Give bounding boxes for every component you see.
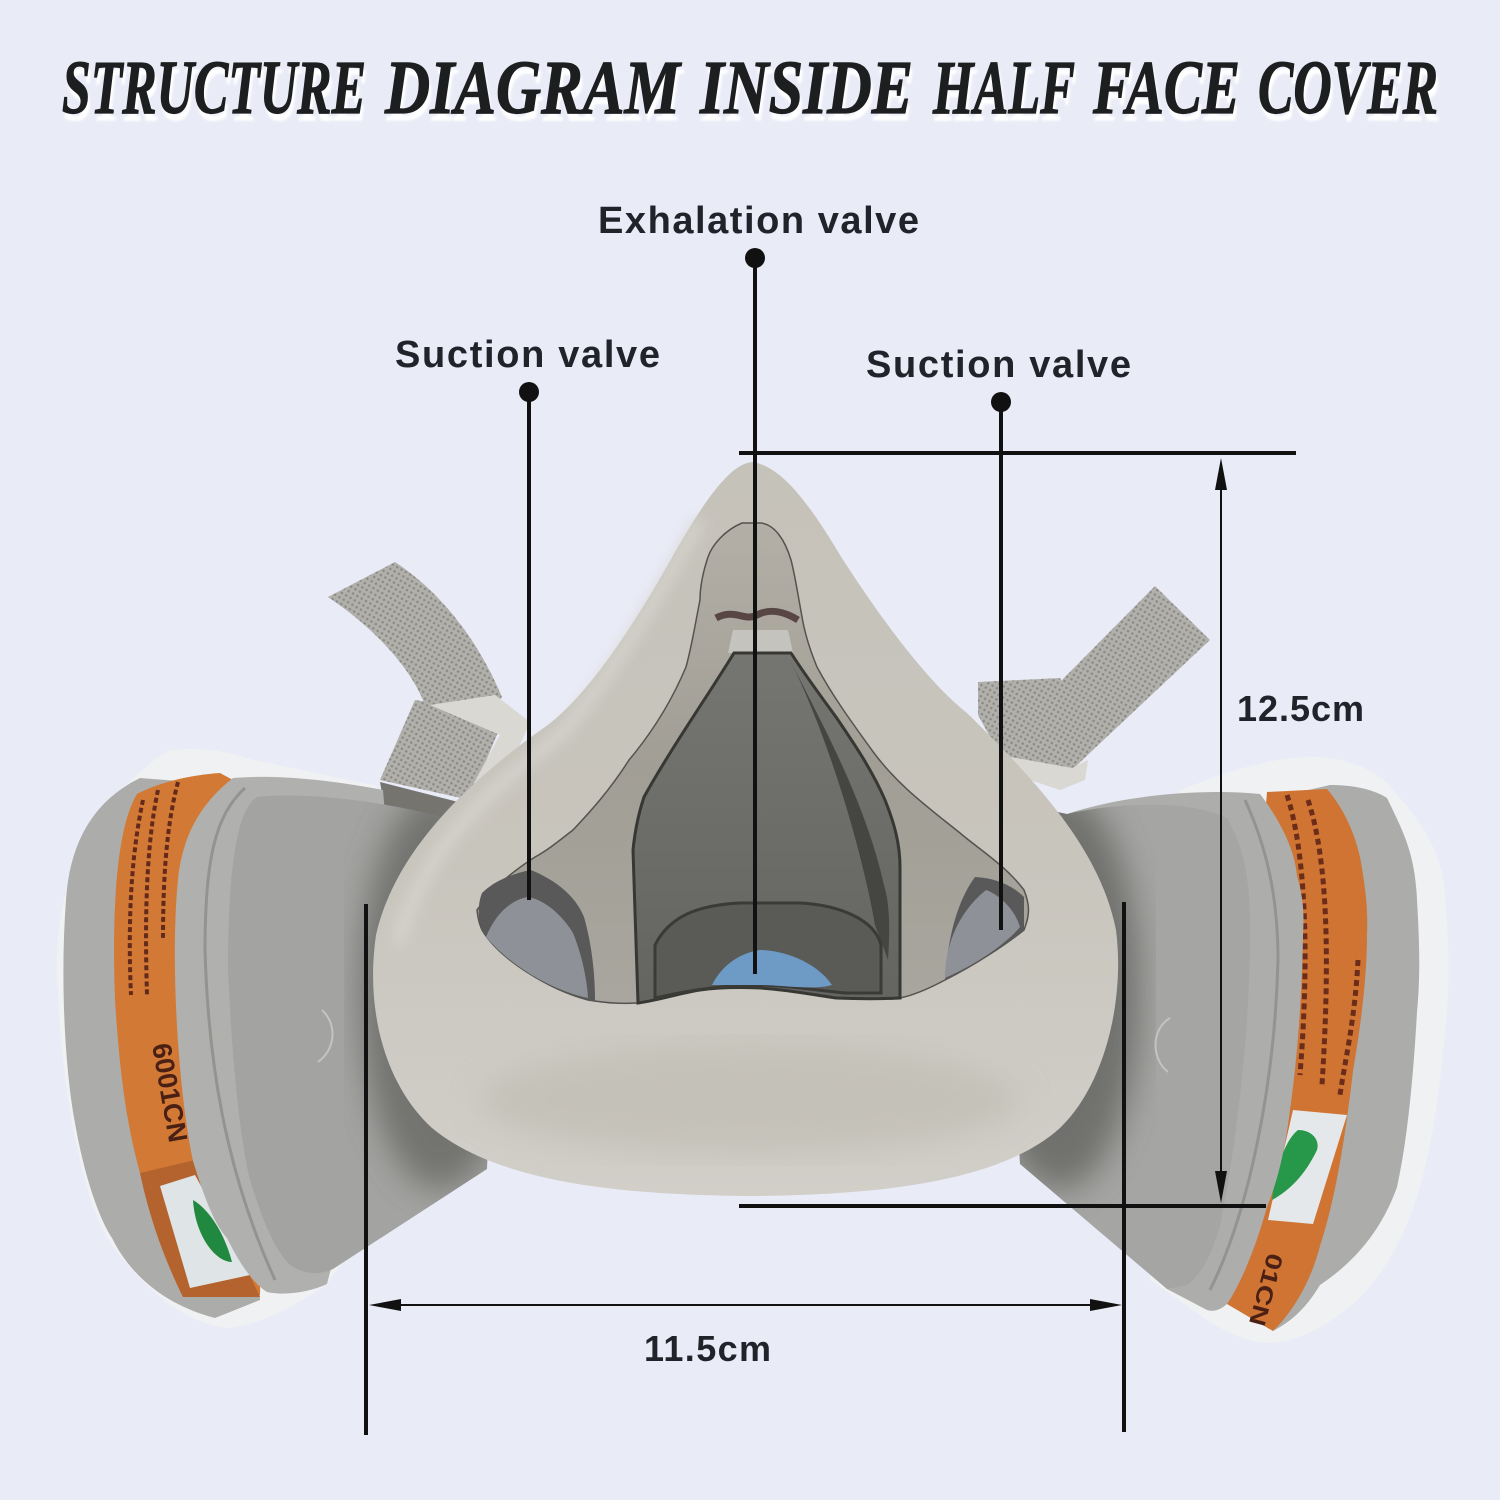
cartridge orange label (114, 773, 270, 1297)
nose ridge line (716, 611, 798, 620)
exhalation valve (712, 950, 832, 987)
cartridge rim (175, 777, 400, 1294)
central valve housing (633, 653, 900, 1003)
title: FACE (1092, 46, 1240, 130)
title: STRUCTURE (62, 46, 366, 130)
green mark (1272, 1130, 1318, 1200)
callout: right suction valve (866, 344, 1131, 930)
cartridge face (1000, 800, 1250, 1289)
height dimension (739, 451, 1364, 1208)
contact shadow (1020, 807, 1156, 1204)
seal highlight (398, 520, 700, 945)
title: INSIDE (701, 53, 915, 137)
left strap buckle tab (430, 695, 530, 790)
cartridge grey rim (1250, 785, 1419, 1331)
title: DIAGRAM (386, 53, 684, 137)
nose step (728, 630, 793, 653)
title: HALF (934, 53, 1077, 137)
left cartridge (63, 773, 488, 1318)
height dimension: 12.5cm (1237, 688, 1364, 729)
width dimension (364, 902, 1126, 1435)
inner cavity (477, 523, 1028, 1003)
width dimension: 11.5cm (644, 1328, 771, 1369)
callout: exhalation valve (598, 200, 919, 974)
title: STRUCTURE (64, 53, 368, 137)
callout: exhalation valve: Exhalation valve (598, 200, 919, 242)
certification sticker (1268, 1110, 1347, 1224)
face emboss (318, 1010, 333, 1062)
title: FACE (1094, 53, 1242, 137)
cartridge orange label (1227, 789, 1367, 1331)
housing dark sides (790, 660, 889, 960)
seal soft shading (480, 1045, 1020, 1155)
cartridge outer shell (57, 749, 400, 1328)
cartridge outer shell (1150, 757, 1449, 1343)
right suction valve (945, 877, 1024, 980)
right strap buckle tab (970, 715, 1088, 790)
model number: 6001CN (146, 1041, 193, 1145)
callout: left suction valve (395, 334, 660, 900)
orange label text lines (1287, 795, 1358, 1095)
title (62, 46, 1440, 137)
left suction valve (479, 870, 595, 1001)
callout: right suction valve: Suction valve (866, 344, 1131, 386)
face seal (373, 462, 1118, 1196)
right cartridge (1020, 785, 1420, 1331)
rim groove (1210, 800, 1278, 1290)
right strap (970, 586, 1210, 790)
lower orange band (140, 1160, 260, 1297)
certification sticker (160, 1175, 250, 1288)
orange label text lines (130, 782, 178, 995)
face emboss (1156, 1018, 1170, 1072)
callout: left suction valve: Suction valve (395, 334, 660, 376)
cartridge rim (1067, 792, 1303, 1311)
green mark (193, 1200, 232, 1262)
left strap (328, 562, 530, 830)
title: INSIDE (699, 46, 913, 130)
model number: 01CN (1244, 1251, 1288, 1329)
mask illustration (57, 462, 1449, 1343)
rim groove (205, 788, 275, 1280)
cartridge face (228, 796, 500, 1273)
cartridge grey rim (63, 778, 260, 1318)
title: DIAGRAM (384, 46, 682, 130)
title: HALF (932, 46, 1075, 130)
contact shadow (345, 806, 488, 1202)
valve arch (655, 903, 881, 998)
